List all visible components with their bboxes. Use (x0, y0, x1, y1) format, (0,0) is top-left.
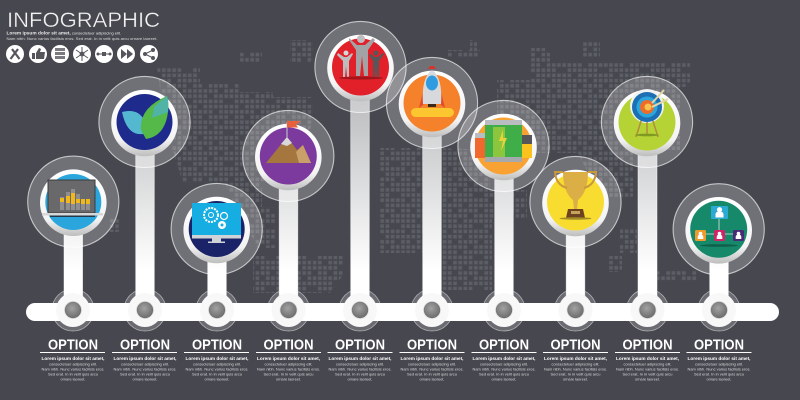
caption 2: Nam nibh. Nunc varius facilisis eros. (114, 366, 176, 372)
caption 4 (256, 338, 321, 382)
caption 3 (184, 338, 249, 382)
caption 5: Nam nibh. Nunc varius facilisis eros. (328, 366, 392, 372)
caption 1: Sed erat. In in velit quis arcu (48, 372, 98, 376)
step 4: mountain flag (243, 110, 334, 310)
step 2: leaves (99, 76, 190, 310)
step 7: batteries (458, 100, 549, 310)
caption 9 (615, 338, 680, 382)
caption 5: consectetuer adipiscing elit. (336, 362, 384, 366)
caption 2: consectetuer adipiscing elit. (121, 362, 169, 366)
caption 5: Sed erat. In in velit quis arcu (335, 372, 385, 376)
caption 1: OPTION (48, 338, 98, 354)
caption 5: Lorem ipsum dolor sit amet, (328, 356, 392, 361)
caption 3: ornare laoreet. (204, 376, 230, 382)
caption 3: consectetuer adipiscing elit. (193, 362, 241, 366)
caption 4: Nam nibh. Nunc varius facilisis eros. (257, 366, 320, 372)
caption 7: ornare laoreet. (492, 376, 516, 382)
caption 8: OPTION (550, 338, 600, 354)
caption 10: consectetuer adipiscing elit. (695, 362, 743, 366)
caption 3: Sed erat. In in velit quis arcu (192, 372, 242, 376)
step 10: org chart (673, 184, 764, 310)
caption 4: Sed erat. In in velit quis arcu (264, 372, 314, 376)
caption 9: Nam nibh. Nunc varius facilisis eros. (616, 366, 679, 372)
caption 7: Lorem ipsum dolor sit amet, (472, 356, 536, 361)
caption 6: Lorem ipsum dolor sit amet, (400, 356, 464, 361)
caption 7: Nam nibh. Nunc varius facilisis eros. (472, 366, 536, 372)
caption 3: Lorem ipsum dolor sit amet, (186, 356, 248, 361)
timeline nodes (52, 289, 740, 331)
caption 1: Nam nibh. Nunc varius facilisis eros. (42, 366, 104, 372)
step 9: target (601, 76, 693, 310)
caption 8: Lorem ipsum dolor sit amet, (544, 356, 607, 361)
caption 2: OPTION (120, 338, 170, 354)
caption 9: Sed erat. In in velit quis arcu (622, 372, 672, 376)
step 6: rocket (386, 57, 478, 310)
caption 4: ornare laoreet. (276, 376, 301, 382)
step 8: trophy (530, 156, 621, 310)
caption 2: ornare laoreet. (132, 376, 158, 382)
world map (110, 36, 700, 296)
caption 9: consectetuer adipiscing elit. (624, 362, 672, 366)
caption 5 (328, 338, 392, 382)
caption 10: Nam nibh. Nunc varius facilisis eros. (688, 366, 750, 372)
caption 1: ornare laoreet. (60, 376, 86, 382)
step 5: people (315, 21, 406, 310)
caption 7 (472, 338, 536, 382)
caption 9: Lorem ipsum dolor sit amet, (616, 356, 679, 361)
caption 10: Lorem ipsum dolor sit amet, (688, 356, 750, 361)
caption 8: Nam nibh. Nunc varius facilisis eros. (544, 366, 607, 372)
caption 8 (543, 338, 608, 382)
header text (6, 30, 158, 41)
caption 2: Lorem ipsum dolor sit amet, (114, 356, 176, 361)
caption 3: Nam nibh. Nunc varius facilisis eros. (186, 366, 248, 372)
caption 1: consectetuer adipiscing elit. (49, 362, 97, 366)
caption 2 (112, 338, 177, 382)
caption 6: Nam nibh. Nunc varius facilisis eros. (400, 366, 464, 372)
step 3: monitor gears (171, 183, 262, 310)
title: INFOGRAPHIC (7, 9, 160, 32)
timeline bar (26, 303, 779, 321)
caption 6: Sed erat. In in velit quis arcu (407, 372, 457, 376)
caption 9: OPTION (622, 338, 672, 354)
caption 10: OPTION (694, 338, 744, 354)
caption 7: Sed erat. In in velit quis arcu (479, 372, 529, 376)
caption 1 (40, 338, 105, 382)
header text: Lorem ipsum dolor sit amet, consectetuer adipiscing elit. (6, 30, 121, 36)
caption 7: OPTION (479, 338, 529, 354)
caption 4: consectetuer adipiscing elit. (264, 362, 312, 366)
caption 7: consectetuer adipiscing elit. (480, 362, 528, 366)
caption 1: Lorem ipsum dolor sit amet, (42, 356, 104, 361)
caption 6: OPTION (407, 338, 457, 354)
caption 8: Sed erat. In in velit quis arcu (550, 372, 600, 376)
caption 10: ornare laoreet. (706, 376, 732, 382)
caption 6: consectetuer adipiscing elit. (408, 362, 456, 366)
icon toolbar (6, 45, 158, 63)
caption 5: ornare laoreet. (348, 376, 372, 382)
header text: Nam nibh. Nunc varius facilisis eros. Sed erat. In in velit quis arcu ornare laoreet. (6, 36, 158, 41)
caption 6: ornare laoreet. (420, 376, 444, 382)
caption 4: OPTION (264, 338, 314, 354)
caption 5: OPTION (335, 338, 385, 354)
caption 10: Sed erat. In in velit quis arcu (694, 372, 744, 376)
caption 3: OPTION (192, 338, 242, 354)
caption 4: Lorem ipsum dolor sit amet, (257, 356, 320, 361)
caption 2: Sed erat. In in velit quis arcu (120, 372, 170, 376)
caption 8: consectetuer adipiscing elit. (552, 362, 600, 366)
step 1: laptop chart (28, 156, 119, 310)
caption 10 (686, 338, 752, 382)
caption 6 (400, 338, 464, 382)
caption 9: ornare laoreet. (635, 376, 660, 382)
caption 8: ornare laoreet. (563, 376, 588, 382)
